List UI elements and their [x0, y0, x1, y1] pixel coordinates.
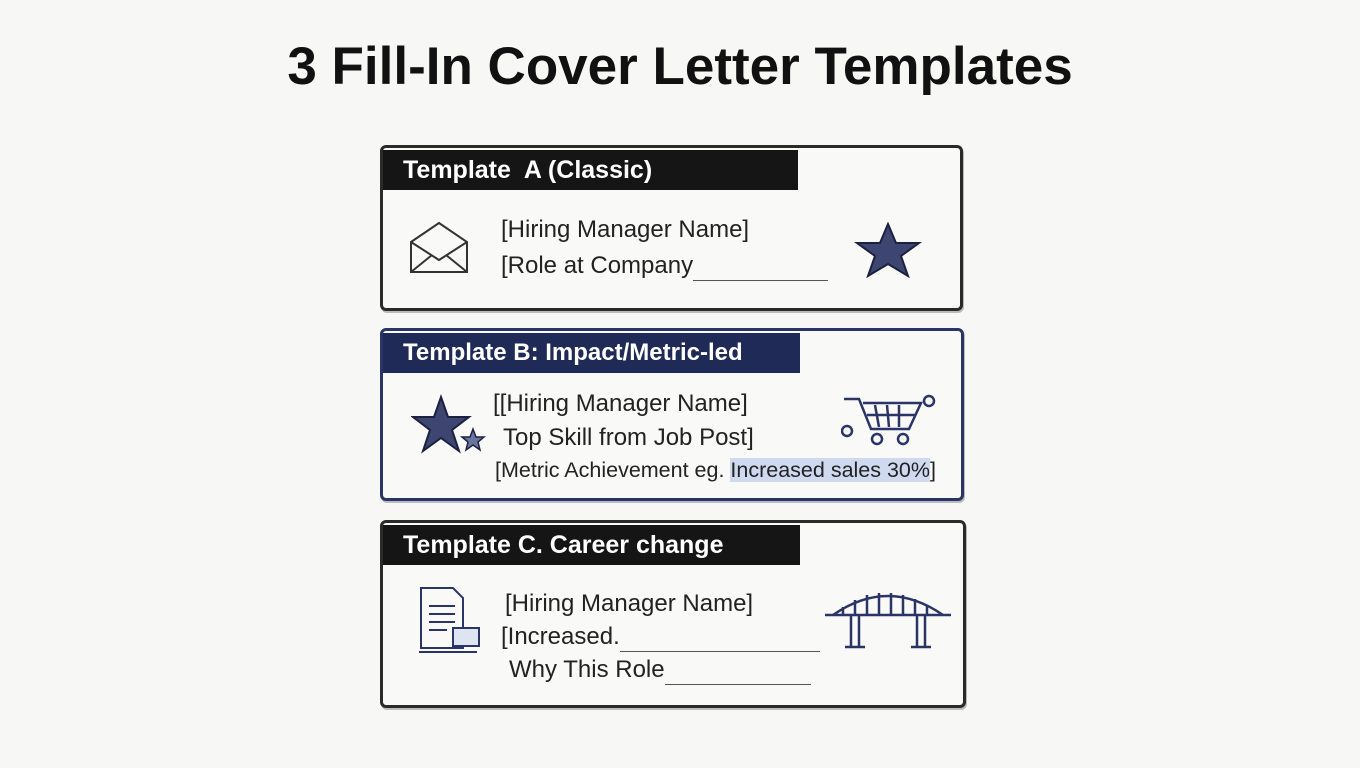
- icon: stars: [411, 394, 486, 454]
- panel: template C: [380, 520, 966, 708]
- panel: template A: [Role at Company: [501, 252, 693, 279]
- heading B: Template B: Impact/Metric-led: [403, 339, 743, 366]
- icon: cart: [841, 394, 936, 446]
- icon: star: [854, 222, 922, 278]
- heading C: [383, 525, 800, 565]
- heading A: Template A (Classic): [403, 156, 652, 184]
- panel: template B: [Metric Achievement eg. Increased sales 30%]: [495, 458, 936, 482]
- heading A: [383, 150, 798, 190]
- panel: template A: [380, 145, 963, 311]
- heading B: [383, 333, 800, 373]
- panel: template B: [380, 328, 964, 501]
- title: 3 Fill-In Cover Letter Templates: [287, 37, 1073, 96]
- panel: template B: Top Skill from Job Post]: [503, 424, 754, 451]
- text C: [Hiring Manager Name]: [505, 590, 753, 617]
- panel: template C: [Increased.: [501, 623, 620, 650]
- icon: bridge: [825, 593, 951, 648]
- text B: [[Hiring Manager Name]: [493, 390, 748, 417]
- text A: [Hiring Manager Name]: [501, 216, 749, 243]
- panel: template C: Why This Role: [509, 656, 665, 683]
- heading C: Template C. Career change: [403, 531, 723, 559]
- icon: document: [419, 587, 480, 653]
- icon: envelope: [410, 222, 468, 273]
